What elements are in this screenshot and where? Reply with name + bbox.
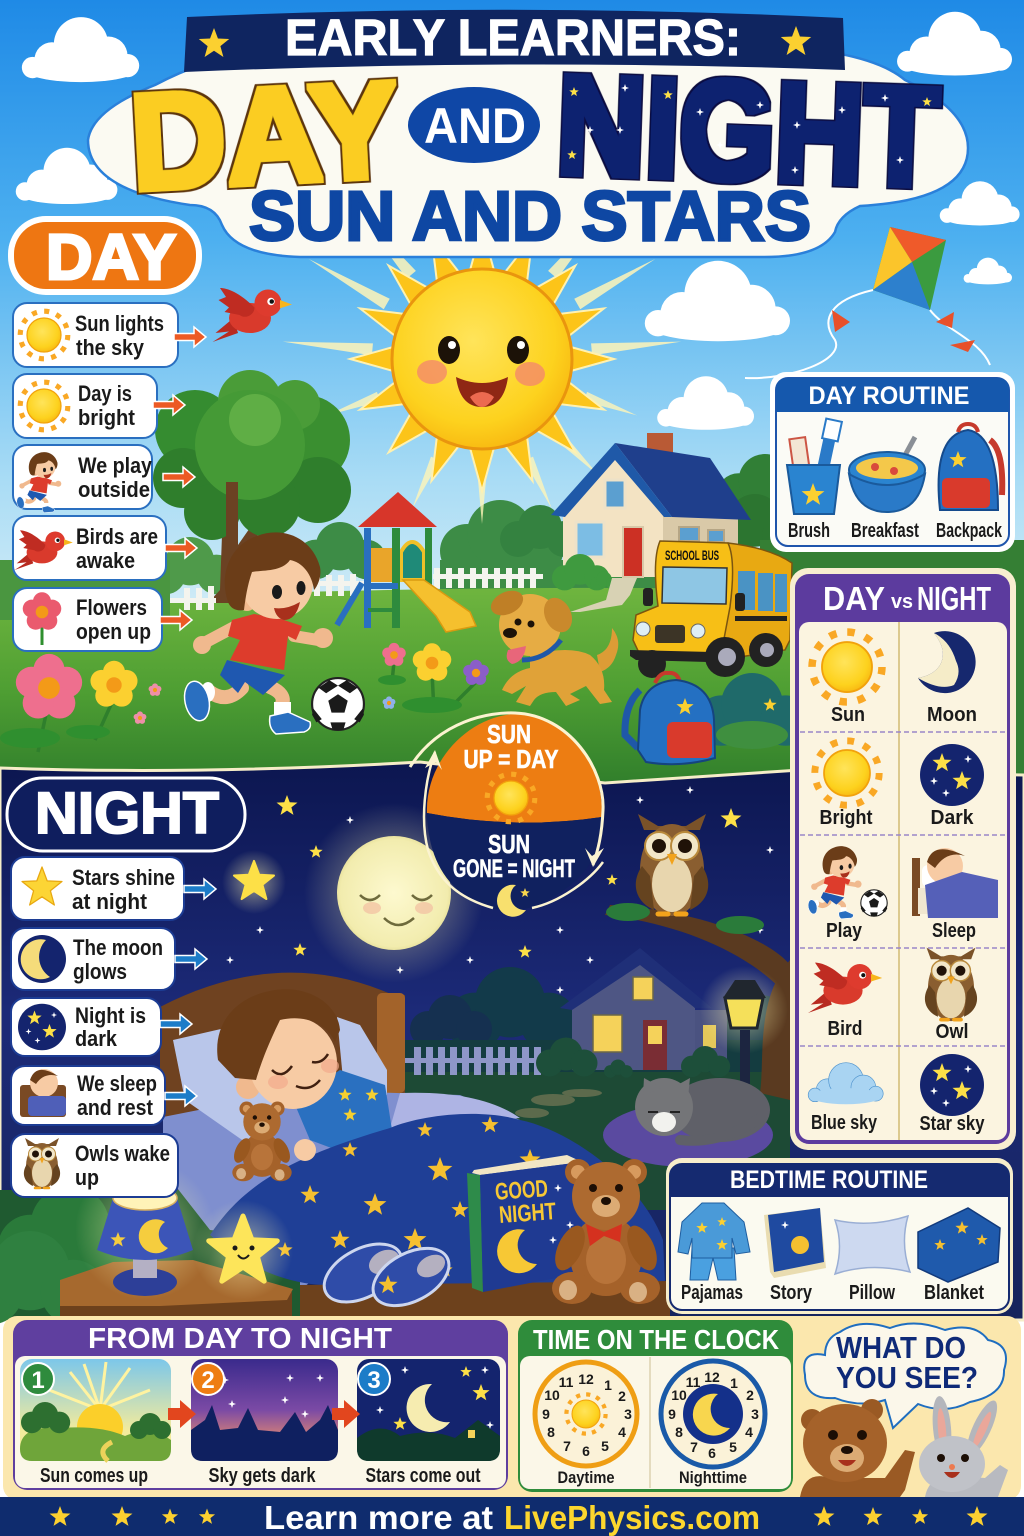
title: early learners: EARLY LEARNERS: (285, 9, 741, 66)
title banner (184, 10, 845, 72)
sun up sun gone badge (410, 713, 604, 917)
bed and sleeping child (160, 973, 665, 1292)
row: blue sky star sky (808, 1054, 985, 1135)
list item: birds are awake: Birds are (76, 524, 158, 549)
day heading pill: DAY (46, 221, 176, 293)
clock: daytime: 9 (542, 1406, 550, 1422)
title: day: DAY (126, 53, 402, 220)
banner star left (199, 28, 229, 57)
clock: daytime: 5 (601, 1438, 609, 1454)
night background (0, 762, 1024, 1320)
list item: moon glows: The moon (73, 935, 163, 960)
sun (282, 159, 682, 524)
badge 2: 2 (201, 1367, 215, 1394)
clock: nighttime: 12 (704, 1369, 720, 1385)
soccer ball (312, 678, 364, 730)
panel: time on the clock: TIME ON THE CLOCK (533, 1324, 779, 1355)
clock: nighttime: 4 (745, 1424, 753, 1440)
teddy bear (549, 1159, 663, 1304)
clock: nighttime: 8 (675, 1424, 683, 1440)
row: play sleep: Sleep (932, 920, 976, 942)
list item: birds are awake: awake (76, 548, 135, 573)
list item: owls wake up (11, 1134, 178, 1197)
clock: nighttime: 9 (668, 1406, 676, 1422)
list item: owls wake up: up (75, 1165, 99, 1190)
title cloud (88, 45, 968, 257)
list item: stars shine: Stars shine (72, 865, 175, 890)
clock: nighttime: 5 (729, 1439, 737, 1455)
panel: day routine: Breakfast (851, 520, 919, 542)
sun up sun gone badge: SUN (487, 719, 531, 749)
list item: owls wake up: Owls wake (75, 1141, 170, 1166)
school bus (630, 541, 792, 678)
panel: time on the clock: Nighttime (679, 1468, 747, 1487)
list item: moon glows (11, 928, 207, 990)
row: bright dark: Bright (820, 807, 873, 829)
footer bar: LivePhysics.com (504, 1499, 760, 1536)
row: bird owl: Owl (936, 1021, 968, 1043)
panel: day routine: DAY ROUTINE (808, 382, 970, 410)
icon: pillow (835, 1216, 910, 1274)
sun up sun gone badge: UP = DAY (464, 744, 558, 774)
sun up sun gone badge: SUN (488, 829, 530, 859)
heading (823, 580, 991, 617)
list item: we play outside: outside (78, 477, 150, 502)
badge 2 (192, 1363, 224, 1395)
bottom panel background (3, 1316, 1021, 1500)
list item: we play outside: We play (78, 453, 153, 478)
clock: daytime: 10 (544, 1387, 560, 1403)
banner star right (781, 26, 811, 55)
night house (536, 948, 730, 1078)
bus sign: SCHOOL BUS (665, 548, 719, 563)
list item: we play outside (13, 445, 195, 513)
panel: day vs night (790, 568, 1016, 1150)
day heading pill (8, 216, 202, 295)
row: play sleep (807, 846, 998, 942)
list item: birds are awake (13, 516, 197, 580)
list item: night is dark: Night is (75, 1003, 146, 1028)
full moon (304, 803, 484, 983)
badge 3 (358, 1363, 390, 1395)
backpack in grass (625, 673, 811, 764)
list item: flowers open up: open up (76, 619, 151, 644)
clock: nighttime: 1 (730, 1375, 738, 1391)
sun up sun gone badge: GONE = NIGHT (453, 855, 575, 883)
list item: sun lights the sky: Sun lights (75, 311, 164, 336)
row: sun moon: Sun (831, 704, 865, 726)
bear waving (800, 1399, 915, 1497)
clock: daytime: 7 (563, 1438, 571, 1454)
glowing star face (222, 850, 286, 914)
clock: daytime: 2 (618, 1388, 626, 1404)
kite (745, 227, 990, 378)
heading: vs (891, 591, 913, 613)
title: sun and stars: SUN AND STARS (249, 177, 811, 255)
night treeline and ground (0, 967, 823, 1325)
heading: DAY (823, 580, 885, 617)
clock: nighttime: 6 (708, 1445, 716, 1461)
dog (487, 586, 618, 706)
list item: flowers open up: Flowers (76, 595, 147, 620)
clock: daytime: 3 (624, 1406, 632, 1422)
house (551, 433, 751, 612)
sky background (0, 0, 1024, 600)
good night book: NIGHT (498, 1198, 557, 1229)
list item: flowers open up (13, 588, 192, 651)
title: night: NIGHT (554, 45, 942, 218)
bunny waving (919, 1395, 1008, 1497)
night tree with owl (605, 814, 790, 1100)
picture: sun comes up (20, 1359, 171, 1461)
panel: from day to night: Stars come out (366, 1465, 481, 1487)
panel: bedtime routine: Pillow (849, 1282, 895, 1304)
list item: we sleep: and rest (77, 1095, 154, 1120)
row: blue sky star sky: Blue sky (811, 1112, 878, 1134)
good night book: GOOD (494, 1175, 549, 1206)
list item: sun lights the sky: the sky (76, 335, 145, 360)
footer bar: Learn more at (264, 1499, 493, 1536)
list item: moon glows: glows (73, 959, 127, 984)
icon: backpack (939, 424, 1002, 510)
clock: daytime: 1 (604, 1377, 612, 1393)
arrow step 2 (332, 1400, 360, 1428)
list item: day is bright: Day is (78, 381, 132, 406)
panel: bedtime routine: BEDTIME ROUTINE (730, 1166, 928, 1194)
list item: day is bright (13, 374, 185, 438)
icon: story book (764, 1208, 826, 1278)
row: bird owl (808, 948, 977, 1043)
badge 3: 3 (367, 1367, 381, 1394)
title: and badge: AND (424, 98, 526, 154)
clock: nighttime: 11 (686, 1374, 701, 1390)
panel: time on the clock: Daytime (558, 1468, 614, 1487)
panel: day routine: Brush (788, 520, 830, 542)
row: blue sky star sky: Star sky (920, 1113, 985, 1135)
good night book (467, 1155, 582, 1292)
bow tie (586, 1224, 622, 1246)
slippers (315, 1232, 458, 1317)
row: sun moon: Moon (927, 704, 977, 726)
row: bright dark (815, 741, 984, 829)
icon: blanket (918, 1208, 1000, 1282)
sleeping cat (603, 1078, 773, 1167)
row: bird owl: Bird (828, 1018, 862, 1040)
row: bright dark: Dark (930, 807, 974, 829)
icon: brush cup (787, 419, 842, 514)
footer bar (0, 1497, 1024, 1536)
list item: night is dark: dark (75, 1026, 118, 1051)
what do you see speech bubble (804, 1323, 1006, 1428)
picture: stars come out (357, 1359, 500, 1461)
clock: nighttime: 10 (671, 1387, 687, 1403)
flowers (0, 643, 489, 752)
clouds (16, 12, 1020, 430)
heading: NIGHT (917, 580, 991, 617)
icon: breakfast bowl (849, 437, 925, 512)
tree (153, 370, 351, 603)
fence (170, 568, 543, 610)
night heading pill (7, 778, 245, 851)
list item: stars shine: at night (72, 889, 148, 914)
clock: daytime: 12 (578, 1371, 594, 1387)
street lamp (700, 966, 788, 1084)
wooden floor (300, 1281, 670, 1316)
panel: bedtime routine (666, 1158, 1013, 1314)
night heading pill: NIGHT (35, 781, 219, 846)
panel: time on the clock (518, 1320, 793, 1492)
glowing star toy (193, 1200, 293, 1300)
row: play sleep: Play (826, 920, 863, 942)
day landscape (0, 454, 1024, 790)
what do you see speech bubble: YOU SEE? (836, 1360, 978, 1395)
picture: sky gets dark (191, 1359, 338, 1461)
clock: nighttime: 2 (746, 1387, 754, 1403)
panel: bedtime routine: Story (770, 1282, 813, 1304)
nightstand with lamp (60, 1160, 293, 1316)
clock: daytime (535, 1362, 637, 1466)
panel: day routine (770, 372, 1015, 552)
fence night (405, 1047, 541, 1075)
row: sun moon (812, 631, 977, 726)
playing boy (181, 532, 333, 734)
panel: from day to night: Sky gets dark (208, 1465, 316, 1487)
clock: daytime: 8 (547, 1424, 555, 1440)
panel: from day to night: FROM DAY TO NIGHT (88, 1323, 392, 1355)
panel: from day to night (13, 1320, 508, 1490)
clock: nighttime: 3 (751, 1406, 759, 1422)
playground (337, 492, 476, 632)
title: and badge (408, 87, 540, 163)
list item: night is dark (11, 998, 192, 1056)
flying bird (212, 288, 292, 342)
list item: sun lights the sky (13, 303, 206, 367)
panel: bedtime routine: Pajamas (681, 1282, 743, 1304)
list item: day is bright: bright (78, 405, 136, 430)
badge 1 (22, 1363, 54, 1395)
clock: daytime: 4 (618, 1424, 626, 1440)
panel: from day to night: Sun comes up (40, 1465, 148, 1487)
list item: we sleep: We sleep (77, 1071, 157, 1096)
panel: bedtime routine: Blanket (924, 1282, 984, 1304)
night stars (226, 786, 774, 994)
arrow step 1 (168, 1400, 196, 1428)
what do you see speech bubble: WHAT DO (836, 1330, 966, 1365)
clock: daytime: 11 (559, 1374, 574, 1390)
clock: daytime: 6 (582, 1443, 590, 1459)
list item: we sleep (11, 1066, 197, 1125)
clock: nighttime (661, 1361, 765, 1467)
list item: stars shine (11, 857, 216, 920)
badge 1: 1 (31, 1367, 45, 1394)
icon: pajamas (678, 1203, 750, 1280)
clock: nighttime: 7 (690, 1439, 698, 1455)
